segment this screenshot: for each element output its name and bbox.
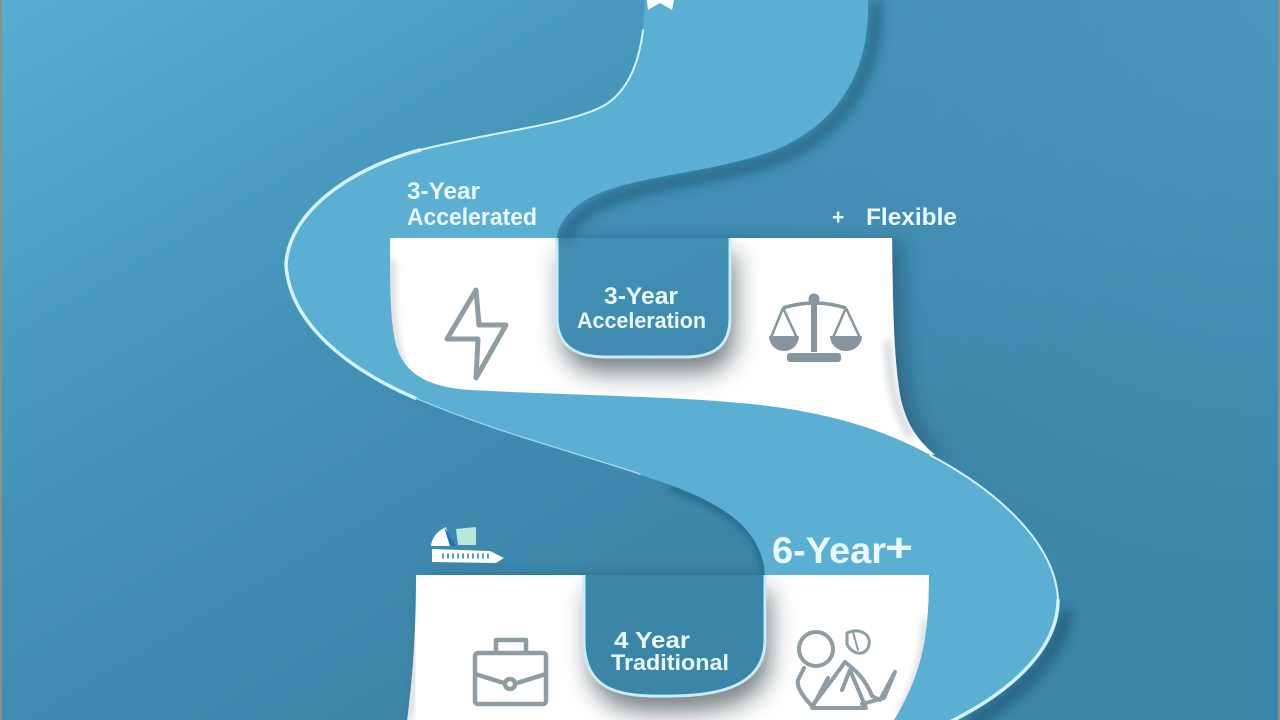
ribbon highlight edges xyxy=(286,30,1058,720)
panel: lower white card xyxy=(407,575,929,720)
bookmark marker xyxy=(647,0,674,10)
label: 3-Year Acceleration: Acceleration xyxy=(577,308,706,333)
panel: upper white card xyxy=(375,238,935,455)
label: 3-Year Accelerated: 3-Year xyxy=(407,178,480,205)
icon: small logo mark xyxy=(431,527,504,563)
panel edge shading xyxy=(391,260,926,720)
label: 3-Year Accelerated xyxy=(407,178,537,231)
label: 3-Year Acceleration: 3-Year xyxy=(604,283,678,310)
label: + Flexible: Flexible xyxy=(866,204,957,231)
ribbon pathway xyxy=(286,0,1058,720)
icon: balance scale xyxy=(769,295,862,362)
label: 3-Year Accelerated: Accelerated xyxy=(407,204,537,231)
panel: lower inset with label xyxy=(584,575,765,696)
icon: briefcase xyxy=(475,640,546,704)
label: 4 Year Traditional: Traditional xyxy=(611,650,729,675)
label: 3-Year Acceleration xyxy=(577,283,706,333)
panel: upper inset with label xyxy=(557,238,730,357)
label: 4 Year Traditional: 4 Year xyxy=(614,627,690,653)
shadow of ribbon xyxy=(564,0,1066,720)
label: 6-Year+: + xyxy=(885,526,913,570)
icon: person with laptop xyxy=(798,631,895,708)
icon: lightning bolt xyxy=(447,290,506,378)
label: + Flexible: + xyxy=(832,206,844,229)
label: 4 Year Traditional xyxy=(611,627,729,675)
label: 6-Year+: 6-Year xyxy=(772,530,886,571)
